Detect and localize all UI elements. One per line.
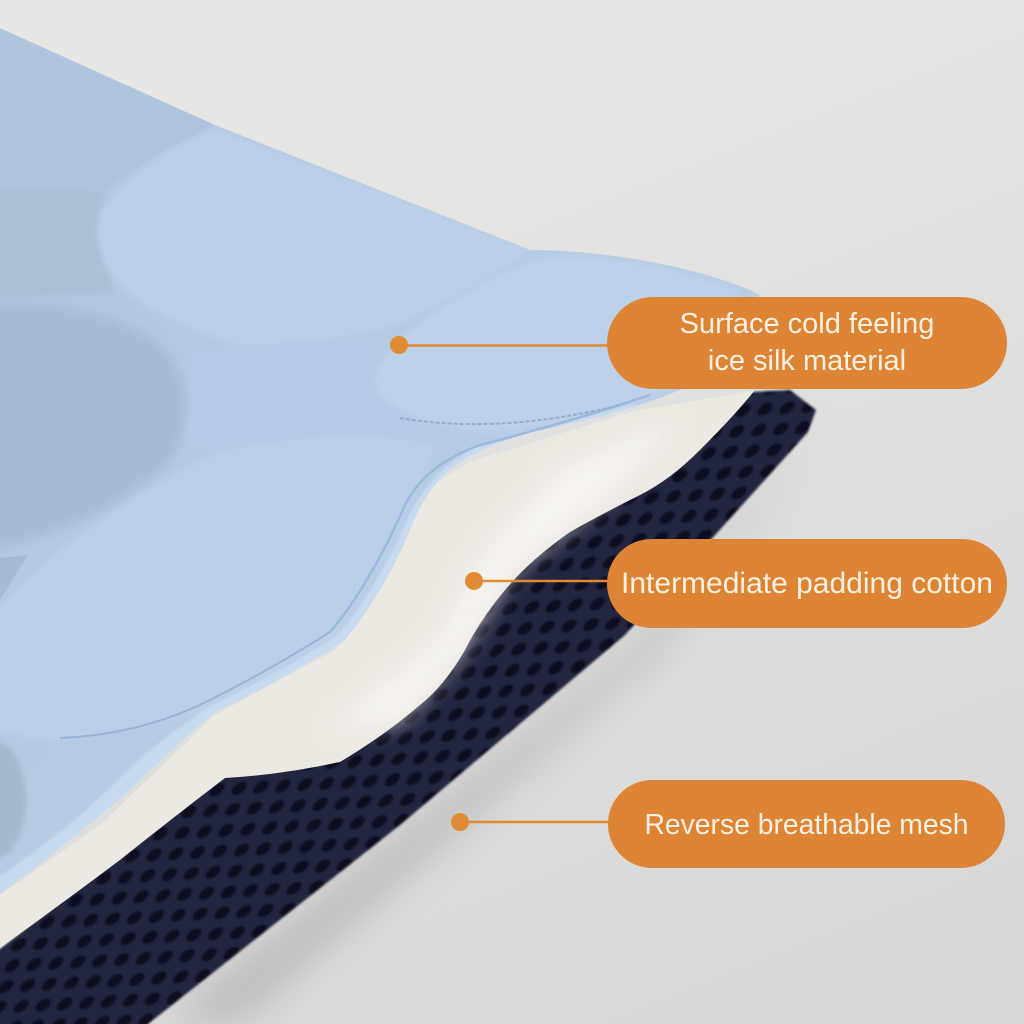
quilted panels — [0, 124, 650, 892]
leader line: surface — [390, 336, 610, 354]
seam line — [330, 395, 650, 632]
panel: upper left — [0, 187, 115, 298]
panel: left dark — [0, 300, 186, 556]
label: breathable mesh — [608, 780, 1005, 868]
panel: right puff — [382, 364, 414, 412]
panel: lower large — [0, 436, 435, 742]
mesh layer — [0, 390, 816, 1024]
cotton padding layer — [0, 390, 755, 948]
panel: lower left dark — [0, 742, 26, 858]
piping edge — [0, 415, 640, 890]
label: surface material: ice silk material — [708, 345, 906, 377]
mat shadow — [160, 425, 820, 1024]
label: padding cotton: Intermediate padding cotton — [621, 567, 993, 600]
mat illustration — [0, 20, 816, 1024]
panel: top left — [214, 124, 215, 125]
leader line: padding — [465, 572, 610, 590]
cotton highlight — [330, 420, 680, 730]
leader line: mesh — [451, 813, 610, 831]
label: surface material — [607, 297, 1007, 389]
label: padding cotton — [607, 539, 1007, 628]
label: breathable mesh: Reverse breathable mesh — [644, 808, 969, 840]
panel: top centre — [98, 132, 274, 298]
panel: middle diamond — [185, 335, 430, 450]
label: surface material: Surface cold feeling — [680, 308, 934, 340]
ice silk surface layer — [0, 28, 760, 893]
